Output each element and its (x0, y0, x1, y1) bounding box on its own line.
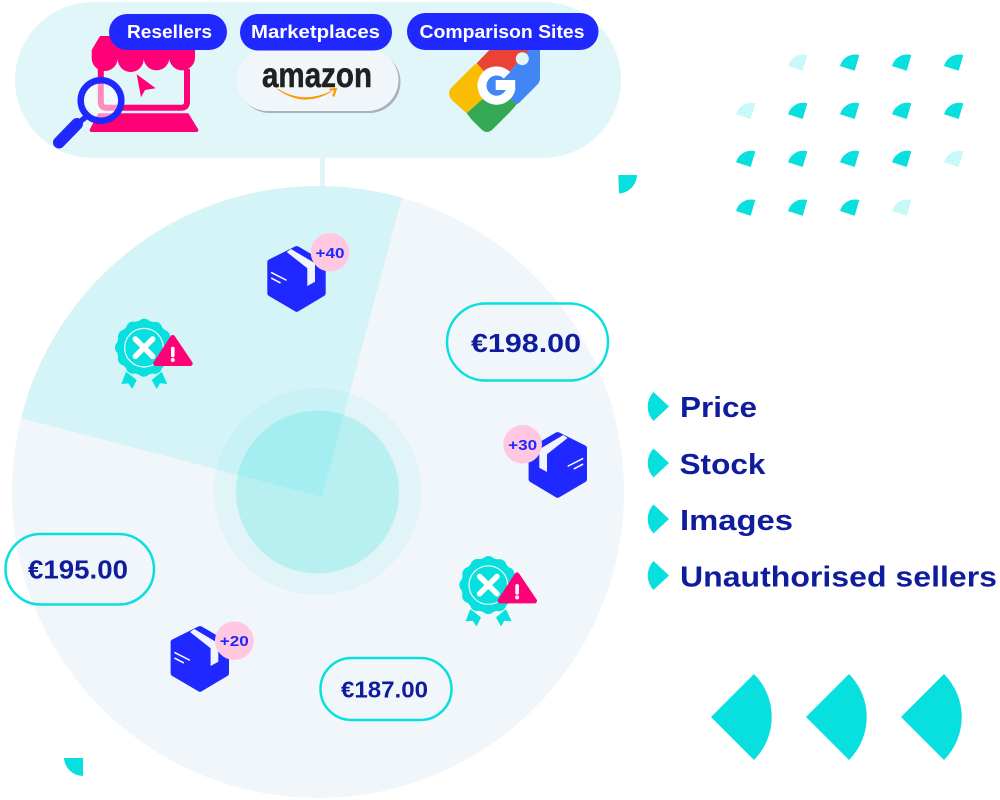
list item: Price (648, 392, 757, 424)
list item: Unauthorised sellers: Unauthorised sellers (680, 562, 997, 594)
panel: sources pill (15, 2, 621, 158)
decorative quadrant top (618, 175, 637, 194)
list item: Images (648, 504, 793, 537)
label: Marketplaces (240, 14, 392, 50)
price tag 195: €195.00 (28, 557, 128, 585)
label: Resellers (109, 14, 227, 50)
label: Resellers: Resellers (127, 21, 212, 42)
list item: Price: Price (680, 392, 757, 424)
decorative dot grid (736, 54, 963, 216)
icon: box +40 (267, 233, 349, 312)
icon: store laptop with magnifier (59, 36, 198, 142)
icon: google tag (449, 50, 540, 132)
icon: rosette warning upper (117, 320, 190, 389)
price tag 195 (6, 534, 154, 604)
amazon logo pill: amazon (262, 56, 372, 95)
list item: Stock (648, 448, 766, 481)
icon: box +30 (503, 425, 587, 498)
badge +30: +30 (508, 437, 537, 454)
price tag 187: €187.00 (341, 677, 428, 703)
radar centre inner disc (236, 410, 399, 574)
amazon logo pill (236, 49, 400, 113)
list item: Stock: Stock (680, 449, 766, 481)
radar wedge (21, 186, 402, 497)
connector (320, 158, 325, 188)
decorative large sectors (711, 674, 962, 760)
price tag 198 (447, 304, 608, 380)
price tag 198: €198.00 (471, 328, 581, 358)
radar centre outer ring (214, 388, 421, 595)
badge +20: +20 (220, 633, 249, 650)
label: Comparison Sites: Comparison Sites (420, 21, 584, 42)
label: Comparison Sites (407, 13, 598, 50)
badge +40: +40 (316, 245, 344, 262)
icon: box +20 (171, 621, 254, 692)
icon: rosette warning lower (461, 558, 534, 626)
list item: Images: Images (680, 505, 793, 537)
price tag 187 (320, 658, 452, 720)
panel: radar circle (0, 150, 624, 798)
label: Marketplaces: Marketplaces (251, 21, 380, 42)
decorative quadrant bottom (64, 758, 83, 776)
